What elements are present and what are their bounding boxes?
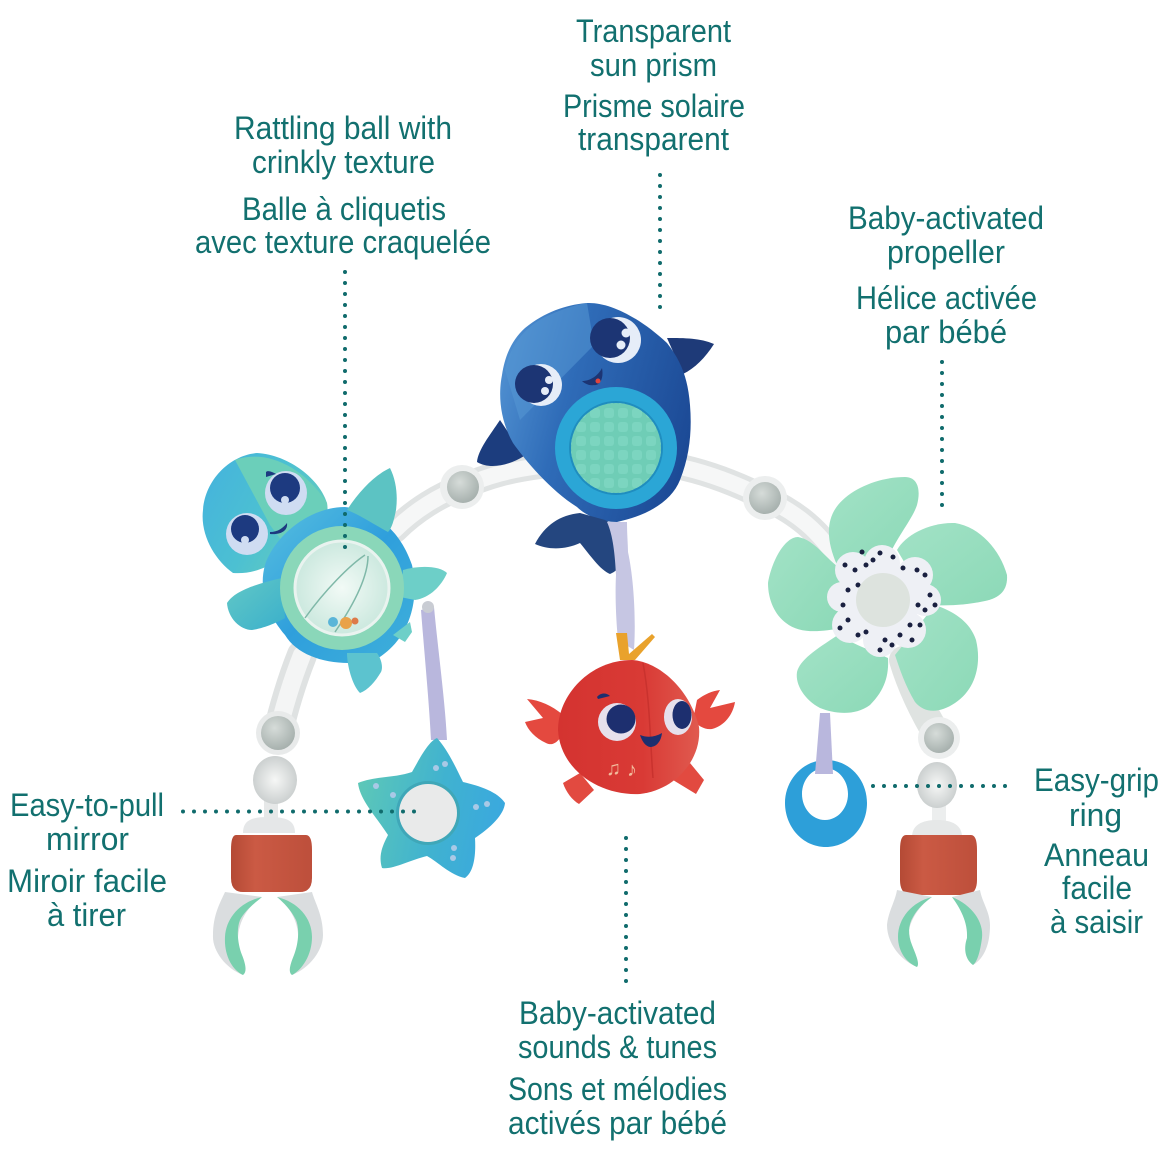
label: easy-to-pull mirror: à tirer	[47, 897, 126, 933]
label: rattling ball	[195, 110, 491, 260]
sun prism	[555, 387, 677, 509]
label: easy-grip ring	[1034, 762, 1159, 940]
polka dot flower	[827, 545, 941, 657]
crab claws	[525, 699, 562, 744]
crab face	[598, 703, 636, 741]
star mirror toy	[358, 601, 505, 878]
left clip	[213, 711, 323, 975]
propeller toy	[768, 477, 1007, 847]
whale body	[500, 303, 691, 522]
label: baby-activated propeller: Baby-activated	[848, 200, 1044, 236]
turtle head	[203, 453, 328, 573]
label: baby-activated propeller: Hélice activée	[856, 280, 1037, 316]
turtle body	[263, 507, 415, 663]
label: rattling ball: Rattling ball with	[234, 110, 452, 146]
label: baby-activated sounds and tunes	[508, 995, 727, 1141]
label: easy-grip ring: ring	[1069, 797, 1122, 833]
crab ribbon	[607, 522, 635, 650]
propeller blades	[829, 477, 919, 565]
label: transparent sun prism	[563, 13, 745, 157]
crab body	[558, 660, 699, 794]
label: easy-to-pull mirror: Miroir facile	[7, 863, 167, 899]
whale toy	[477, 303, 714, 574]
label: easy-to-pull mirror: Easy-to-pull	[10, 787, 164, 823]
crab toy: ♪	[627, 759, 637, 781]
rattling ball	[280, 526, 404, 650]
label: rattling ball: crinkly texture	[252, 144, 435, 180]
label: rattling ball: avec texture craquelée	[195, 224, 491, 260]
label: baby-activated propeller	[848, 200, 1044, 350]
right clip	[887, 717, 990, 967]
arch frame	[278, 465, 939, 738]
label: baby-activated sounds and tunes: activés par bébé	[508, 1105, 727, 1141]
label: easy-grip ring: à saisir	[1050, 904, 1143, 940]
whale tail	[535, 513, 623, 574]
whale eyes	[520, 364, 562, 406]
turtle toy	[203, 453, 447, 693]
label: easy-to-pull mirror	[7, 787, 167, 933]
whale fins	[667, 338, 714, 374]
label: easy-grip ring: facile	[1062, 870, 1132, 906]
crab toy	[525, 522, 735, 804]
orange tag	[616, 633, 655, 660]
label: baby-activated sounds and tunes: sounds & tunes	[518, 1029, 717, 1065]
ribbon	[421, 607, 447, 740]
turtle flippers	[347, 468, 397, 532]
label: baby-activated propeller: par bébé	[885, 314, 1007, 350]
label: transparent sun prism: Transparent	[576, 13, 731, 49]
music notes: ♫	[606, 758, 621, 780]
label: transparent sun prism: transparent	[578, 121, 729, 157]
label: baby-activated sounds and tunes: Sons et mélodies	[508, 1071, 727, 1107]
label: baby-activated propeller: propeller	[887, 234, 1005, 270]
propeller hub	[856, 573, 910, 627]
label: rattling ball: Balle à cliquetis	[242, 191, 446, 227]
dotted leader lines	[183, 175, 1016, 986]
label: transparent sun prism: Prisme solaire	[563, 88, 745, 124]
grip ring ribbon	[815, 713, 833, 774]
label: baby-activated sounds and tunes: Baby-activated	[519, 995, 716, 1031]
grip ring	[785, 760, 867, 847]
label: transparent sun prism: sun prism	[590, 47, 717, 83]
label: easy-grip ring: Anneau	[1044, 837, 1149, 873]
label: easy-to-pull mirror: mirror	[46, 821, 129, 857]
